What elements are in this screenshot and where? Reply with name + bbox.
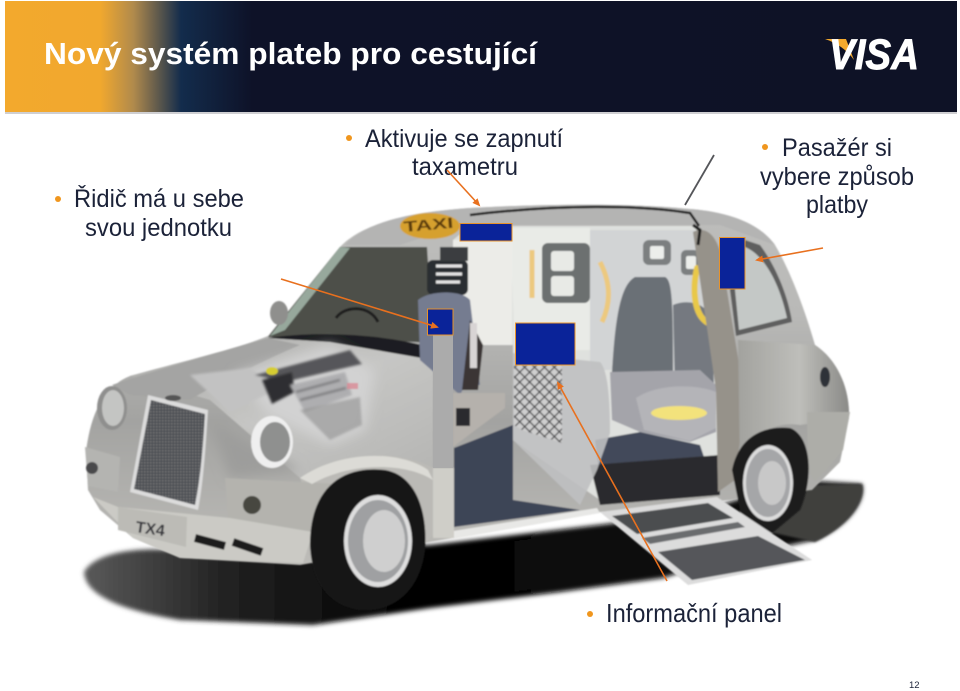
arrow: driver unit (281, 279, 437, 327)
wheel arch shading (210, 420, 300, 478)
interior wall (453, 226, 720, 500)
partition panel (513, 353, 610, 505)
text: driver unit: svou jednotku (85, 214, 232, 242)
rear wheel (732, 428, 809, 535)
number plate: TX4 (134, 519, 166, 540)
lower vents (195, 538, 262, 552)
steering wheel (336, 309, 378, 322)
front left bumper (85, 447, 120, 492)
engine cutaway (190, 345, 375, 445)
right headlight (251, 416, 293, 468)
blue box: roof meter (460, 224, 512, 241)
car body (86, 205, 849, 565)
text: passenger payment choice: platby (806, 191, 868, 219)
driver headrest (427, 247, 468, 295)
grille (130, 395, 208, 510)
rear bumper (807, 412, 850, 482)
blue box: information panel (516, 323, 575, 365)
text: meter activation: Aktivuje se zapnutí (365, 125, 563, 153)
header banner (5, 1, 957, 114)
front wheel (310, 469, 425, 610)
door edge (693, 230, 745, 492)
blue box: passenger display (720, 238, 745, 289)
yellow grab handle (695, 268, 708, 323)
number plate (118, 507, 187, 547)
VISA logo: VISA (829, 31, 919, 79)
cabin floor (454, 425, 580, 527)
text: driver unit: Řidič má u sebe (74, 184, 244, 213)
door sill (453, 508, 600, 539)
orange grab strips (532, 250, 608, 322)
text: passenger payment choice (760, 134, 914, 219)
lower front console (453, 393, 505, 447)
text: passenger payment choice: vybere způsob (760, 163, 914, 191)
fuel cap (820, 367, 830, 387)
windscreen (268, 247, 433, 343)
taxi roof sign: TAXI (403, 215, 454, 236)
rear seat (610, 277, 716, 442)
blue box: driver unit (428, 309, 453, 335)
pillar (433, 468, 454, 538)
hood (130, 336, 433, 481)
text: passenger payment choice: Pasažér si (782, 134, 892, 162)
wing mirror (270, 301, 288, 325)
ramp (600, 497, 812, 585)
hood emblem (165, 395, 181, 401)
taxi illustration (84, 155, 863, 625)
text: information panel: Informační panel (606, 598, 782, 628)
left headlight (97, 386, 127, 430)
text: meter activation: taxametru (412, 153, 518, 181)
front right bumper (225, 478, 338, 532)
fog lamp (243, 496, 261, 514)
page number: 12 (909, 680, 920, 691)
taxi roof sign (400, 213, 460, 239)
text: driver unit (55, 184, 244, 242)
arrow: meter (447, 170, 479, 205)
rear window (730, 240, 792, 336)
grey strip (433, 335, 453, 468)
front wing (300, 456, 433, 560)
cabin windows (542, 240, 699, 303)
rear quarter panel (738, 340, 849, 470)
driver seat (418, 292, 480, 395)
arrow: passenger display (757, 248, 823, 260)
text: meter activation (346, 125, 563, 181)
title: Nový systém plateb pro cestující (44, 36, 538, 71)
arrow: information panel (558, 383, 667, 581)
roof (345, 205, 775, 245)
antenna (685, 155, 714, 205)
luggage net (514, 365, 562, 443)
ground shadow (84, 480, 863, 625)
lower bumper (93, 497, 313, 563)
